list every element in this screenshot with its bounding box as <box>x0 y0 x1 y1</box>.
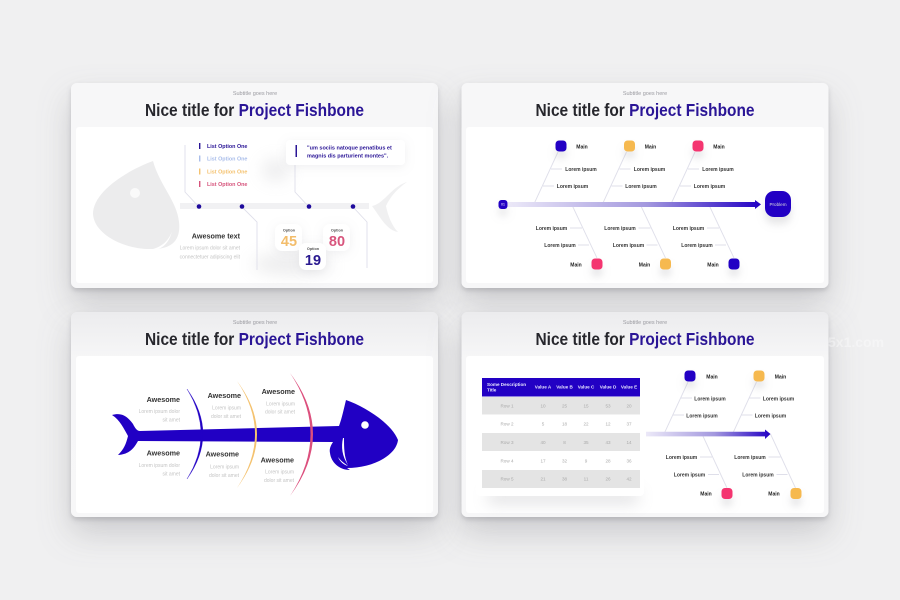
table: Value D <box>600 384 617 390</box>
title: Nice title for Project Fishbone <box>536 329 755 349</box>
stat: 80: 80 <box>329 234 345 250</box>
table: 36 <box>626 458 632 464</box>
labels: bottom bones: Lorem ipsum <box>604 226 636 232</box>
arrow: spine <box>508 200 761 209</box>
table: 21 <box>540 476 546 482</box>
nodes: top mains: Main <box>645 144 656 150</box>
title: Nice title for Project Fishbone <box>145 100 364 120</box>
table: Row 4 <box>500 458 514 464</box>
labels: top bones: Lorem ipsum <box>565 167 597 173</box>
connector lines <box>185 145 367 270</box>
arrow: spine <box>646 430 770 439</box>
text block: upper middle: Awesome <box>208 391 241 400</box>
text block: upper middle: Lorem ipsum <box>212 406 241 412</box>
text block: lower middle: Awesome <box>206 450 239 458</box>
table: Row 5 <box>500 476 514 482</box>
labels: bottom bones: Lorem ipsum <box>544 243 576 249</box>
text block: awesome text: Lorem ipsum dolor sit amet <box>180 246 241 252</box>
stat: 19: 19 <box>305 253 321 269</box>
stat: 45 <box>275 224 302 251</box>
list options: List Option One <box>207 156 247 162</box>
table: 9 <box>585 458 588 464</box>
table: 17 <box>540 458 546 464</box>
list options: List Option One <box>207 182 247 188</box>
node: start: 01 <box>501 202 505 206</box>
title: Nice title for Project Fishbone <box>536 100 755 120</box>
node: problem <box>765 191 791 217</box>
labels: top bones: Lorem ipsum <box>763 396 795 402</box>
panel: bottom-right slide <box>462 312 828 517</box>
text block: lower middle: Lorem ipsum <box>210 464 239 470</box>
table: Value A <box>535 384 552 390</box>
text block: awesome text: Awesome text <box>192 232 241 240</box>
labels: top bones: Lorem ipsum <box>694 184 726 190</box>
text block: lower middle <box>206 450 240 479</box>
list options <box>199 143 247 188</box>
stat: 45: Option <box>283 228 296 232</box>
node: start <box>498 200 508 209</box>
text block: upper left: Lorem ipsum dolor <box>139 409 180 415</box>
nodes: bottom mains <box>570 258 740 270</box>
table: 12 <box>605 422 611 426</box>
table: 28 <box>605 458 611 464</box>
arc: yellow <box>237 381 257 488</box>
text block: upper left: Awesome <box>147 395 180 404</box>
labels: top bones: Lorem ipsum <box>694 396 726 402</box>
table: Row 1 <box>500 404 514 408</box>
table: 15 <box>583 404 589 408</box>
nodes: bottom mains: Main <box>707 262 719 268</box>
labels: bottom bones <box>536 226 713 249</box>
subtitle: Subtitle goes here <box>233 320 277 326</box>
subtitle: Subtitle goes here <box>623 320 667 326</box>
stat: 45: 45 <box>281 234 297 250</box>
spine dots <box>197 204 355 209</box>
table: 40 <box>540 440 546 445</box>
labels: top bones: Lorem ipsum <box>702 167 734 173</box>
subtitle: Subtitle goes here <box>623 91 667 97</box>
nodes: top mains: Main <box>775 374 786 380</box>
table: 32 <box>562 458 567 464</box>
text block: upper right <box>262 387 296 416</box>
table: 42 <box>626 476 632 482</box>
text block: awesome text: connectetuer adipiscing elit <box>180 254 241 260</box>
text block: upper right: Awesome <box>262 387 295 396</box>
text block: lower left <box>139 448 181 478</box>
table: Value B <box>556 384 573 390</box>
labels: bottom bones: Lorem ipsum <box>673 226 705 232</box>
text block: lower right: dolor sit amet <box>264 478 295 484</box>
table: 53 <box>605 404 611 408</box>
table: 11 <box>584 476 589 482</box>
nodes: bottom mains: Main <box>570 262 582 268</box>
labels: bottom bones: Lorem ipsum <box>742 472 774 478</box>
callout: quote: magnis dis parturient montes". <box>307 154 389 160</box>
table: Title <box>487 388 497 392</box>
table: 26 <box>605 476 611 482</box>
table: Value C <box>578 384 595 390</box>
table: 35 <box>583 440 589 445</box>
labels: top bones: Lorem ipsum <box>755 414 787 420</box>
table: Some Description <box>487 382 526 387</box>
table: 10 <box>540 404 546 408</box>
list options: List Option One <box>207 144 247 150</box>
table: 14 <box>626 440 632 445</box>
text block: lower left: Lorem ipsum dolor <box>139 463 180 469</box>
labels: bottom bones: Lorem ipsum <box>536 226 568 232</box>
labels: bottom bones <box>666 455 774 478</box>
table: 43 <box>605 440 611 445</box>
labels: bottom bones: Lorem ipsum <box>674 472 706 478</box>
nodes: top mains <box>556 140 725 152</box>
icon: blue fish <box>112 400 398 470</box>
labels: top bones: Lorem ipsum <box>625 184 657 190</box>
text block: lower right: Lorem ipsum <box>265 470 294 476</box>
nodes: top mains: Main <box>713 144 725 150</box>
fishbone diagonal bones <box>534 152 734 258</box>
watermark: 5x1.com <box>828 334 884 350</box>
table: Value E <box>621 384 637 390</box>
text block: upper left <box>139 395 181 424</box>
fishbone diagonal bones <box>664 382 796 488</box>
list options: List Option One <box>207 170 247 176</box>
stat: 19: Option <box>307 247 320 251</box>
node: problem: Problem <box>769 202 787 207</box>
text block: upper middle <box>208 391 242 420</box>
arc: pink <box>290 373 313 496</box>
text block: awesome text <box>180 232 241 260</box>
title: Nice title for Project Fishbone <box>145 329 364 349</box>
nodes: bottom mains: Main <box>700 492 712 498</box>
table: Row 3 <box>500 440 514 445</box>
labels: top bones <box>686 396 795 420</box>
subtitle: Subtitle goes here <box>233 91 277 97</box>
callout: quote <box>286 140 405 165</box>
table: 25 <box>562 404 567 408</box>
table: 38 <box>562 476 567 482</box>
nodes: top mains: Main <box>576 144 588 150</box>
stat: 19 <box>299 243 326 270</box>
arc: blue <box>187 389 203 479</box>
nodes: bottom mains: Main <box>639 262 650 268</box>
table: 5 <box>542 422 545 426</box>
labels: top bones: Lorem ipsum <box>634 167 666 173</box>
stat: 80: Option <box>331 228 344 232</box>
table: 20 <box>626 404 632 408</box>
text block: upper right: Lorem ipsum <box>266 402 295 408</box>
text block: lower right <box>261 456 295 484</box>
text block: upper middle: dolor sit amet <box>211 414 242 420</box>
fish spine bar <box>180 203 369 209</box>
panel: top-left slide <box>71 83 438 288</box>
table: 37 <box>626 422 632 426</box>
labels: bottom bones: Lorem ipsum <box>666 455 698 461</box>
soft shadows behind cards <box>252 159 332 275</box>
labels: bottom bones: Lorem ipsum <box>681 243 713 249</box>
labels: top bones <box>557 167 734 190</box>
table: Row 2 <box>500 422 514 426</box>
panel: bottom-left slide <box>71 312 438 517</box>
callout: quote: "um sociis natoque penatibus et <box>307 146 392 152</box>
labels: top bones: Lorem ipsum <box>686 414 718 420</box>
table: 18 <box>562 422 567 426</box>
labels: top bones: Lorem ipsum <box>557 184 589 190</box>
text block: lower left: Awesome <box>147 448 180 458</box>
labels: bottom bones: Lorem ipsum <box>734 455 766 461</box>
nodes: bottom mains <box>700 488 802 499</box>
text block: upper right: dolor sit amet <box>265 410 296 416</box>
text block: upper left: sit amet <box>162 418 181 424</box>
nodes: top mains <box>684 370 786 382</box>
text block: lower right: Awesome <box>261 456 294 464</box>
icon: grey fish tail <box>372 182 407 232</box>
nodes: bottom mains: Main <box>768 492 780 498</box>
table: 22 <box>583 422 589 426</box>
stat: 80 <box>323 224 350 251</box>
nodes: top mains: Main <box>706 374 718 380</box>
labels: bottom bones: Lorem ipsum <box>613 243 645 249</box>
text block: lower left: sit amet <box>162 472 181 478</box>
table <box>476 372 644 502</box>
icon: grey fish head <box>93 161 179 249</box>
text block: lower middle: dolor sit amet <box>209 473 240 479</box>
table: 8 <box>563 440 566 445</box>
panel: top-right slide <box>462 83 828 288</box>
